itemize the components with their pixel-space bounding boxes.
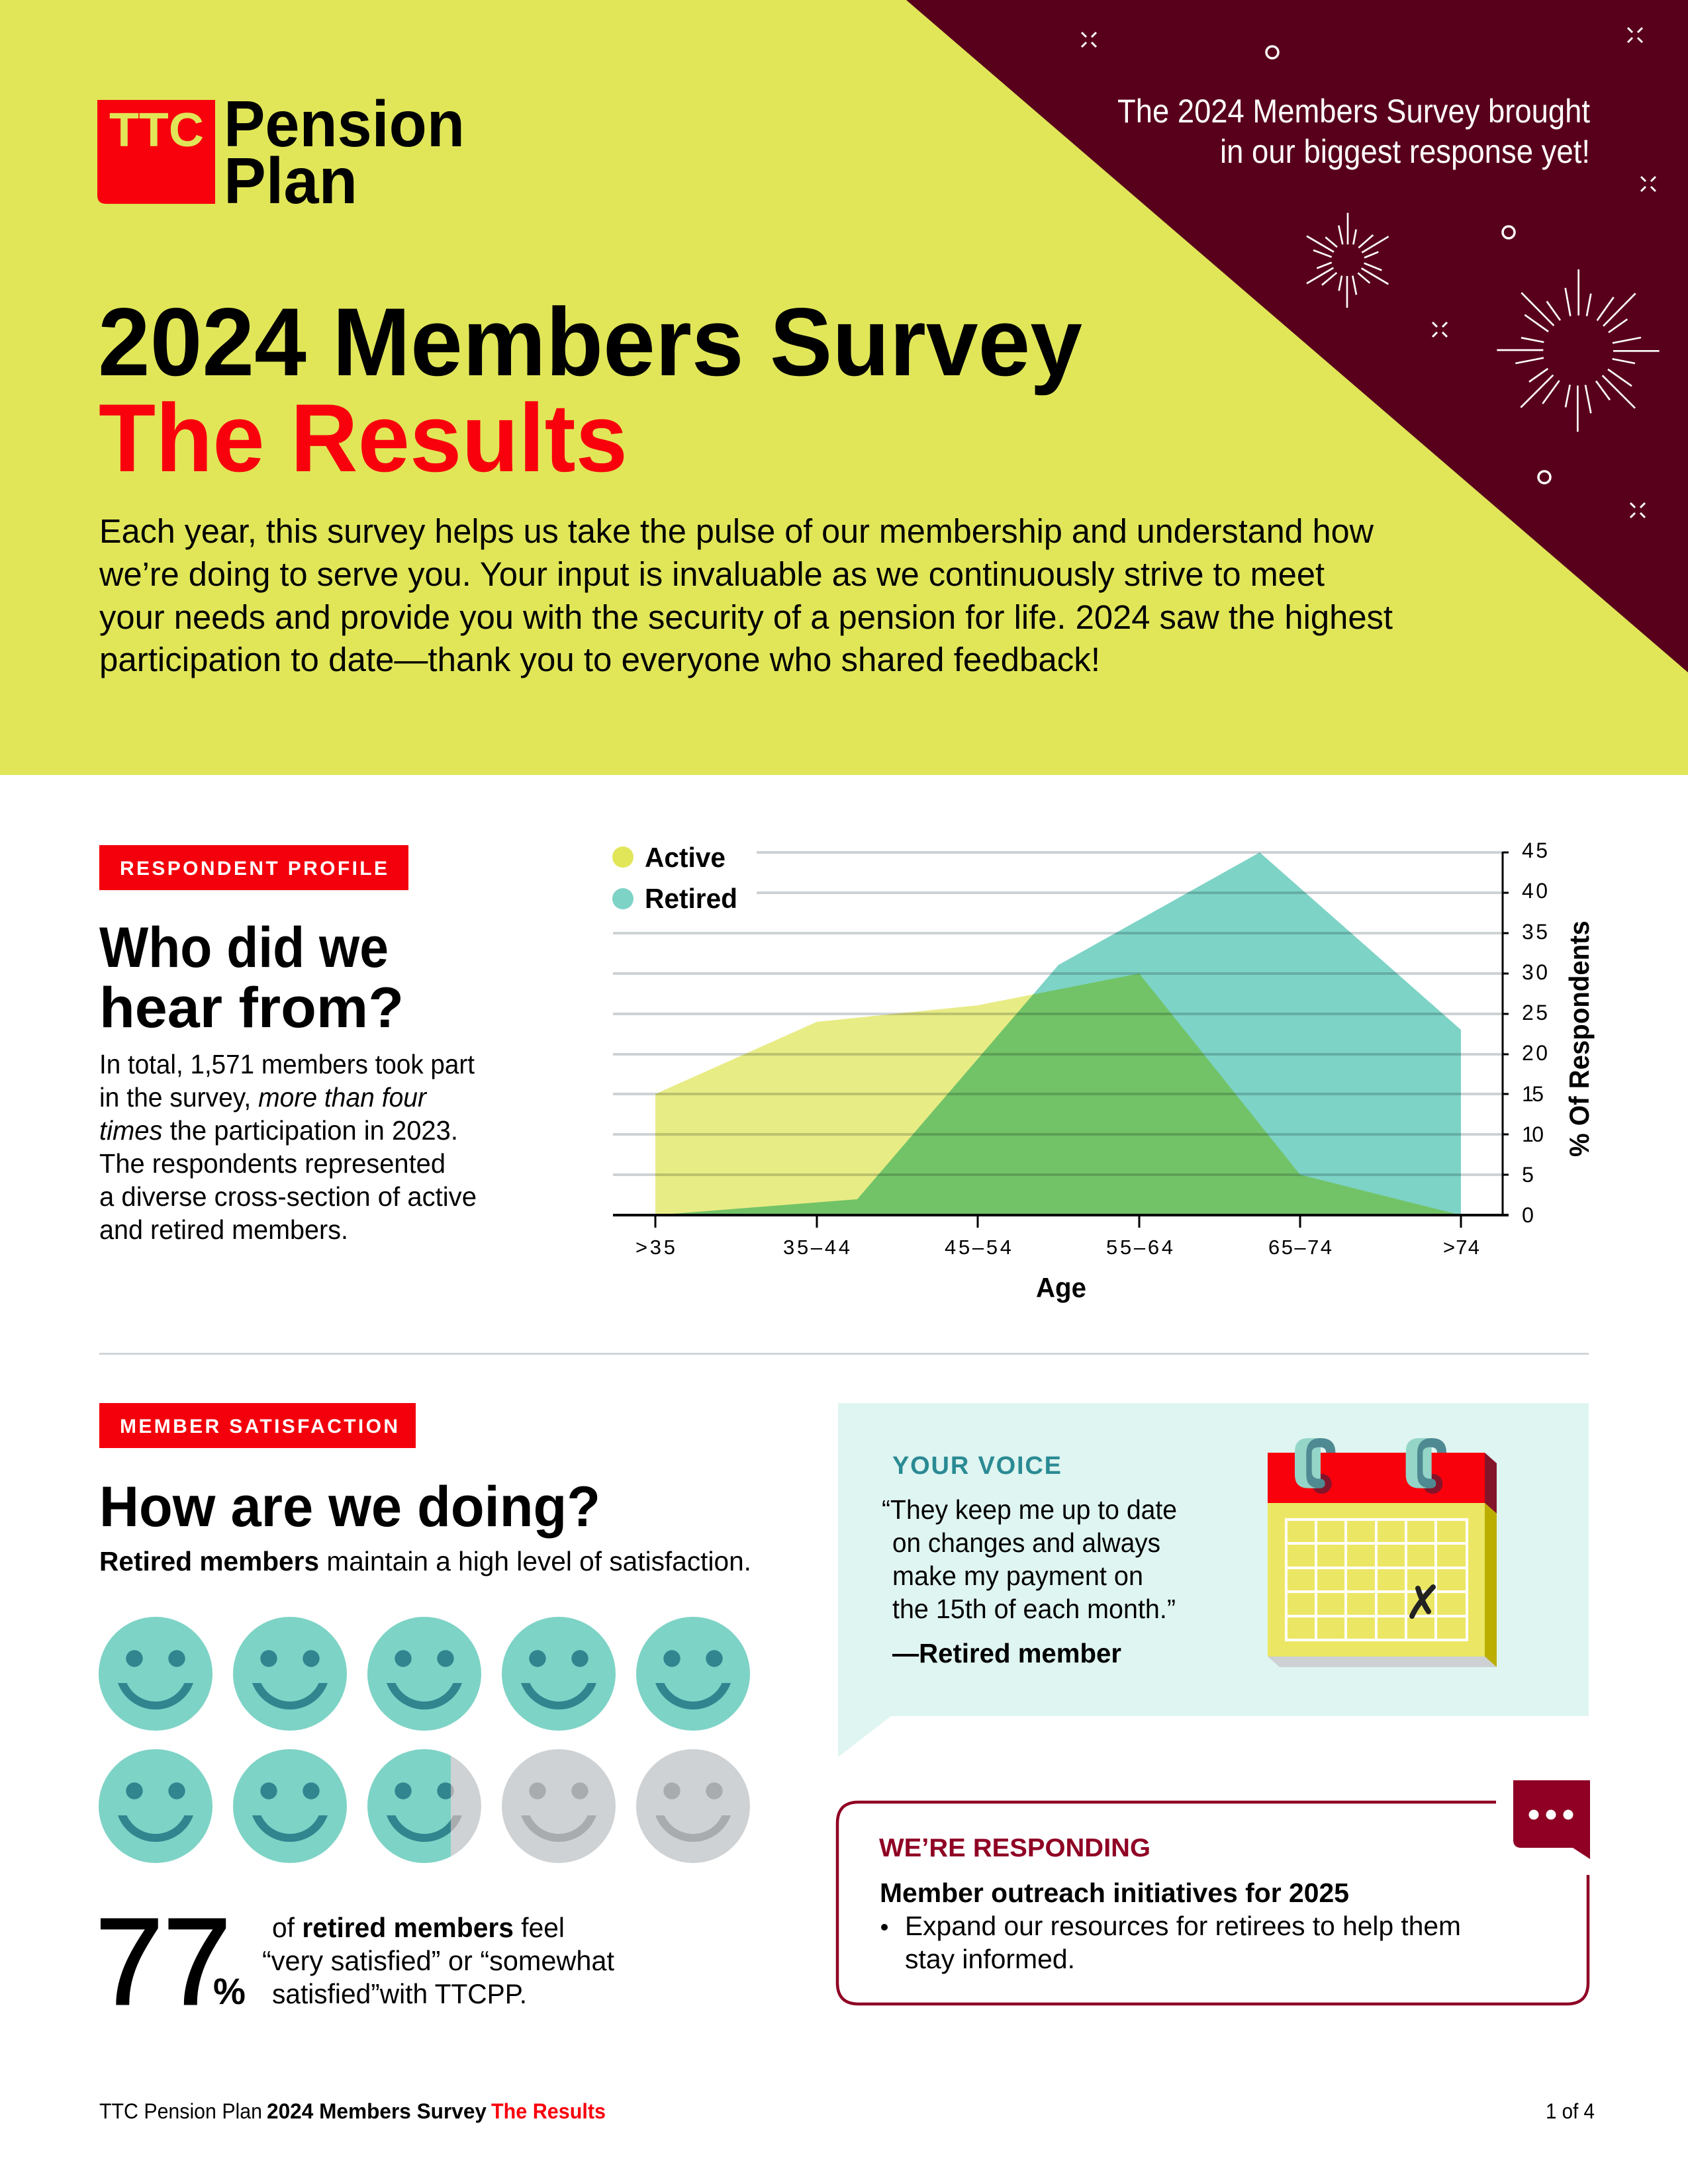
logo: Plan xyxy=(224,144,357,217)
y axis labels: 20 xyxy=(1522,1041,1548,1065)
tag: member satisfaction xyxy=(99,1403,416,1448)
text: respondent summary: a diverse cross-section of active xyxy=(99,1181,477,1212)
footer: 1 of 4 xyxy=(1546,2099,1595,2123)
icon: large firework xyxy=(1497,269,1660,432)
y axis title: % Of Respondents xyxy=(1564,921,1595,1157)
tag: respondent profile xyxy=(99,845,408,890)
text: respondent summary xyxy=(99,1049,477,1245)
text: respondent summary: and retired members. xyxy=(99,1214,348,1245)
x axis labels: 55–64 xyxy=(1106,1236,1173,1259)
intro text: your needs and provide you with the security of a pension for life. 2024 saw the highest xyxy=(99,598,1393,636)
logo xyxy=(97,87,465,217)
grid lines xyxy=(613,852,1503,1175)
y axis labels: 30 xyxy=(1522,960,1548,984)
stat: 77 percent: 77 xyxy=(95,1893,231,2030)
text: stat description: satisfied”with TTCPP. xyxy=(272,1978,527,2009)
text: outreach initiatives: Member outreach initiatives for 2025 xyxy=(880,1878,1349,1908)
x axis labels: 35–44 xyxy=(783,1236,850,1259)
heading: we're responding: WE’RE RESPONDING xyxy=(879,1834,1150,1862)
footer: 2024 Members Survey xyxy=(267,2099,487,2123)
x axis labels: >74 xyxy=(1443,1236,1479,1259)
text: stat description: of retired members feel xyxy=(272,1912,565,1943)
panel: maroon corner xyxy=(906,0,1688,672)
quote: “They keep me up to date xyxy=(882,1494,1177,1525)
intro text xyxy=(99,512,1393,678)
axes and ticks xyxy=(613,852,1509,1228)
text: stat description xyxy=(262,1912,614,2009)
icon: calendar xyxy=(1268,1438,1497,1667)
panel: we're responding xyxy=(837,1780,1590,2004)
heading: who did we hear from: hear from? xyxy=(99,976,404,1040)
callout: biggest response: The 2024 Members Survey brought xyxy=(1117,93,1590,130)
y axis labels: 5 xyxy=(1522,1163,1534,1187)
logo: Pension xyxy=(224,87,465,160)
y axis labels: 10 xyxy=(1522,1122,1544,1146)
y axis labels: 40 xyxy=(1522,879,1548,903)
footer: The Results xyxy=(491,2099,606,2123)
icon grid: smileys 77 percent xyxy=(99,1617,750,1863)
title: The Results xyxy=(99,384,628,492)
text: respondent summary: times the participation in 2023. xyxy=(99,1115,458,1146)
y axis labels: 25 xyxy=(1522,1001,1548,1024)
legend xyxy=(612,842,737,914)
quote: —Retired member xyxy=(892,1638,1121,1668)
heading: who did we hear from xyxy=(99,916,404,1040)
intro text: participation to date—thank you to everyone who shared feedback! xyxy=(99,641,1100,678)
panel: your voice xyxy=(838,1403,1589,1757)
icon: sparkles and circles xyxy=(1082,28,1656,518)
title: 2024 Members Survey xyxy=(98,288,1082,396)
y axis labels: 35 xyxy=(1522,920,1548,944)
logo: TTC xyxy=(109,104,204,157)
text: outreach initiatives xyxy=(880,1878,1461,1974)
quote xyxy=(882,1494,1177,1668)
legend: Retired xyxy=(645,883,737,914)
text: respondent summary: in the survey, more than four xyxy=(99,1082,428,1113)
heading: your voice: YOUR VOICE xyxy=(892,1452,1061,1480)
stat: 77 percent: % xyxy=(213,1970,246,2012)
x axis labels: 65–74 xyxy=(1268,1236,1332,1259)
x axis title: Age xyxy=(1036,1272,1086,1303)
y axis labels: 45 xyxy=(1522,839,1548,862)
intro text: we’re doing to serve you. Your input is invaluable as we continuously strive to meet xyxy=(99,555,1325,593)
series: retired xyxy=(655,852,1461,1215)
text: outreach initiatives: Expand our resources for retirees to help them xyxy=(905,1911,1461,1941)
y axis labels: 0 xyxy=(1522,1203,1534,1227)
footer: TTC Pension Plan xyxy=(99,2099,262,2123)
footer xyxy=(99,2099,1595,2123)
heading: how are we doing: How are we doing? xyxy=(99,1475,600,1539)
title xyxy=(98,288,1082,492)
x axis labels: 45–54 xyxy=(945,1236,1011,1259)
text: stat description: “very satisfied” or “somewhat xyxy=(262,1945,614,1976)
quote: make my payment on xyxy=(892,1561,1143,1591)
series: active xyxy=(655,974,1461,1215)
quote: the 15th of each month.” xyxy=(892,1594,1176,1624)
heading: who did we hear from: Who did we xyxy=(99,916,389,979)
y axis labels xyxy=(1522,839,1548,1227)
legend: Active xyxy=(645,842,726,873)
y axis labels: 15 xyxy=(1522,1082,1544,1106)
header background xyxy=(0,0,1688,775)
intro text: Each year, this survey helps us take the pulse of our membership and understand how xyxy=(99,512,1374,550)
icon: small firework xyxy=(1307,213,1389,308)
text: outreach initiatives: stay informed. xyxy=(905,1944,1075,1974)
callout: biggest response: in our biggest response yet! xyxy=(1220,133,1590,170)
icon: speech bubble xyxy=(1513,1780,1590,1859)
area chart: respondents by age xyxy=(612,839,1595,1303)
tag: member satisfaction: MEMBER SATISFACTION xyxy=(120,1416,398,1437)
callout: biggest response xyxy=(1117,93,1590,170)
text: respondent summary: In total, 1,571 members took part xyxy=(99,1049,475,1079)
tag: respondent profile: RESPONDENT PROFILE xyxy=(120,858,387,880)
x axis labels: >35 xyxy=(635,1236,675,1259)
x axis labels xyxy=(635,1236,1479,1259)
text: respondent summary: The respondents represented xyxy=(99,1148,445,1179)
quote: on changes and always xyxy=(892,1527,1160,1558)
text: satisfaction summary: Retired members maintain a high level of satisfaction. xyxy=(99,1546,751,1576)
